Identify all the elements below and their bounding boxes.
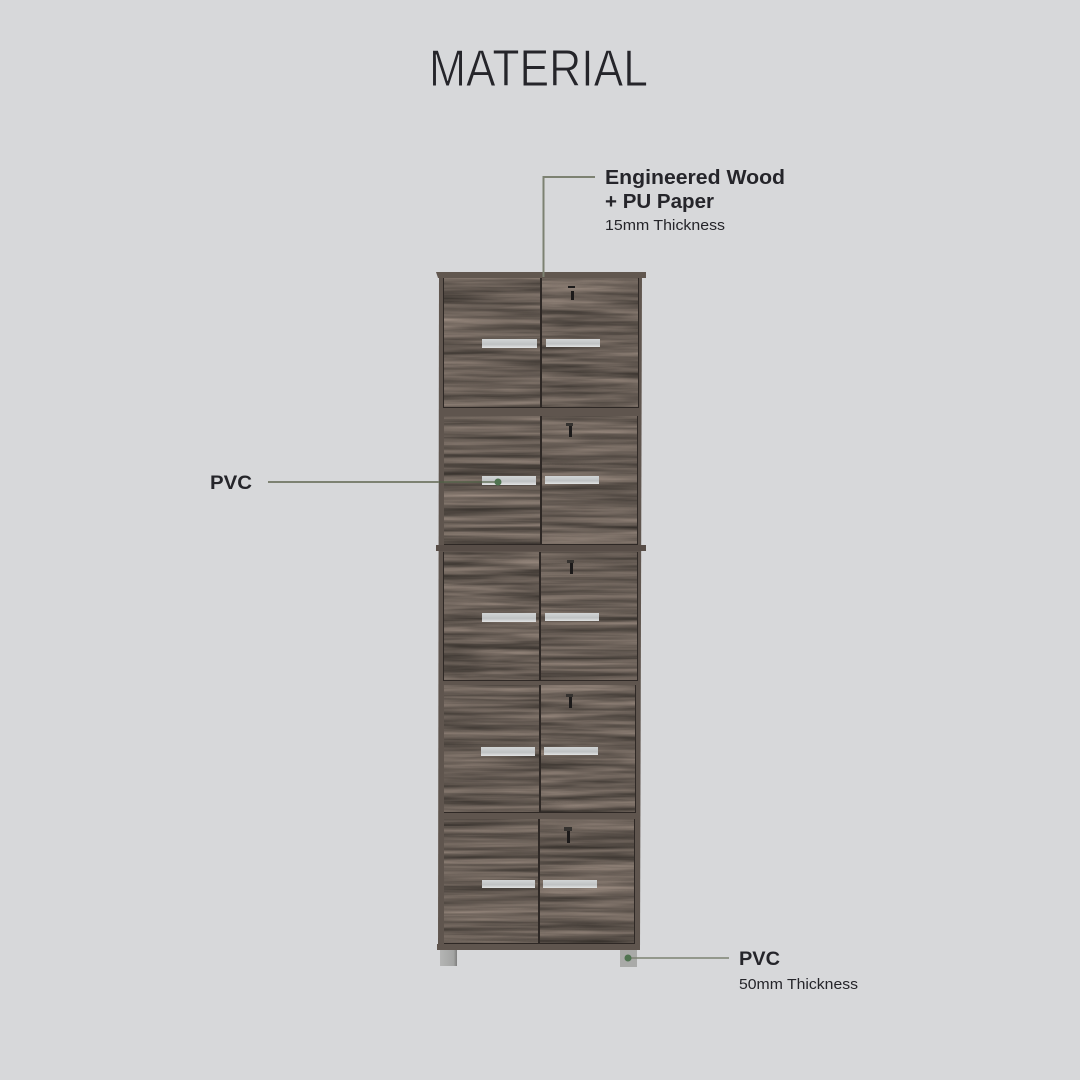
cabinet section 2 (444, 416, 638, 545)
leader line: top (544, 177, 595, 277)
cabinet section 4 (444, 685, 636, 813)
cabinet legs (440, 950, 637, 967)
label: 50mm thickness: 50mm Thickness (739, 976, 858, 993)
cabinet (436, 272, 646, 967)
leader line: left (268, 481, 439, 483)
title: MATERIAL (429, 40, 648, 98)
callout: pvc edge (210, 473, 502, 494)
label: 15mm thickness: 15mm Thickness (605, 217, 725, 234)
leader line inside cabinet (439, 481, 498, 483)
cabinet section 1 (443, 278, 639, 408)
callout: engineered wood (544, 167, 785, 277)
label: engineered wood: Engineered Wood (605, 167, 785, 189)
callout: pvc leg (624, 949, 858, 993)
middle board (436, 545, 646, 551)
leader line: bottom (628, 957, 729, 959)
cabinet carcass (438, 272, 642, 950)
cabinet section 5 (444, 819, 635, 944)
label: pvc leg: PVC (739, 949, 780, 970)
leader dot: left (494, 478, 502, 486)
label: pvc: PVC (210, 473, 252, 494)
top board (436, 272, 646, 278)
cabinet section 3 (443, 552, 638, 681)
base board (437, 944, 640, 950)
leader dot: bottom (624, 954, 632, 962)
label: pu paper: + PU Paper (605, 191, 714, 213)
